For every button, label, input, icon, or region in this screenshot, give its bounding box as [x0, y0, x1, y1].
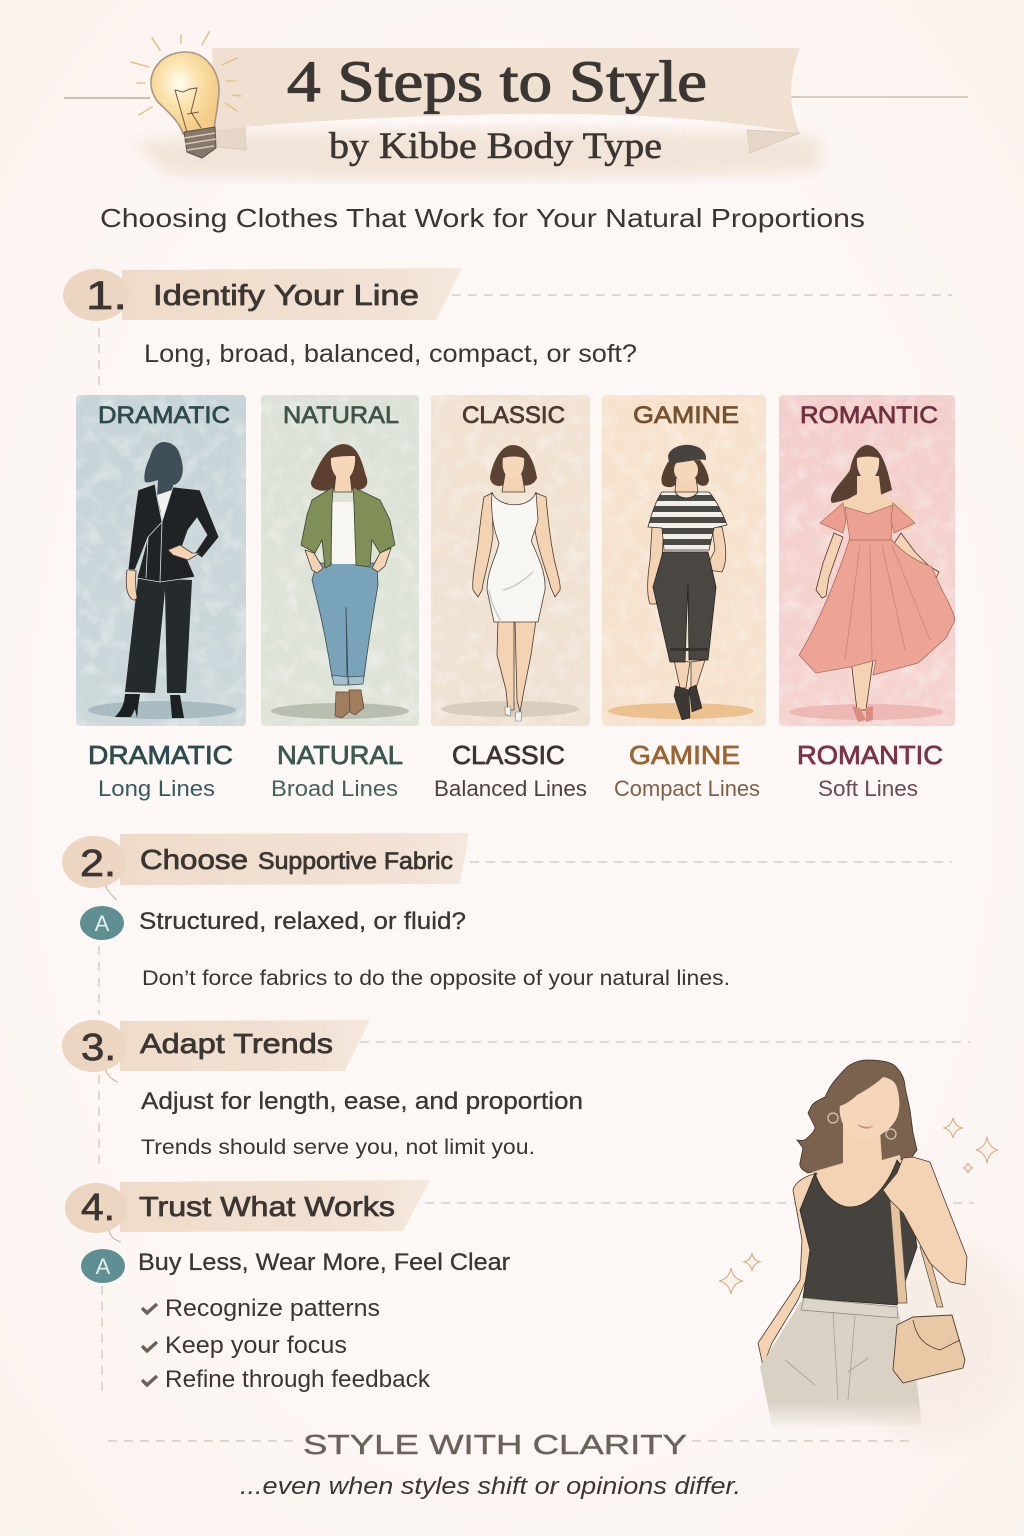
title banner [64, 48, 968, 179]
step 2 heading [62, 833, 952, 900]
checklist: Refine through feedback [165, 1366, 431, 1393]
step 3 heading: Adapt Trends [140, 1028, 333, 1059]
step 1 heading [63, 268, 952, 321]
chest and neck [812, 1120, 905, 1215]
watercolor wash behind woman [845, 1240, 1024, 1440]
step 2 heading: Supportive Fabric [258, 848, 453, 875]
panel: natural [261, 395, 419, 726]
face [840, 1077, 899, 1140]
checklist: Recognize patterns [165, 1295, 380, 1322]
step 4 heading: Trust What Works [139, 1191, 395, 1222]
panel: natural: NATURAL [283, 402, 399, 429]
type label: gamine: GAMINE [629, 740, 740, 770]
marker A: step 2 [80, 906, 124, 940]
step 4 prompt: Buy Less, Wear More, Feel Clear [138, 1249, 510, 1276]
title text: 4 Steps to Style [287, 49, 707, 114]
step 3 heading: 3. [81, 1027, 116, 1069]
marker A: step 4: A [96, 1254, 111, 1279]
trousers [760, 1298, 922, 1430]
type label: natural: Broad Lines [271, 776, 398, 801]
step 1 prompt: Long, broad, balanced, compact, or soft? [144, 340, 637, 368]
type label: romantic [797, 740, 943, 801]
hair [797, 1060, 917, 1173]
step 3 heading [62, 1020, 970, 1082]
figure: dramatic [115, 442, 219, 718]
type label: gamine [614, 740, 760, 801]
type label: natural [271, 740, 403, 801]
checklist: Keep your focus [165, 1332, 347, 1359]
panel: romantic [779, 395, 955, 726]
type label: classic [434, 740, 587, 801]
marker A: step 4 [81, 1249, 125, 1283]
type label: romantic: ROMANTIC [797, 740, 943, 770]
step 4 heading: 4. [81, 1187, 115, 1229]
checklist [142, 1295, 431, 1393]
step 2 heading: Choose [140, 844, 248, 875]
footer tagline: ...even when styles shift or opinions differ. [240, 1473, 741, 1500]
type label: dramatic [88, 740, 233, 801]
type label: dramatic: Long Lines [98, 776, 215, 801]
step 1 heading: Identify Your Line [153, 280, 419, 312]
type label: dramatic: DRAMATIC [88, 740, 233, 770]
illustration: woman with handbag [758, 1060, 967, 1430]
type label: gamine: Compact Lines [614, 776, 760, 801]
step 2 prompt: Structured, relaxed, or fluid? [139, 908, 466, 935]
panel: dramatic [76, 395, 246, 726]
intro sentence: Choosing Clothes That Work for Your Natural Proportions [100, 203, 865, 233]
panel: gamine [602, 395, 766, 726]
step 2 note: Don’t force fabrics to do the opposite of your natural lines. [142, 967, 730, 990]
step 4 heading [65, 1180, 974, 1242]
panel: classic: CLASSIC [462, 402, 565, 429]
right arm and hand [883, 1157, 967, 1285]
subtitle text: by Kibbe Body Type [329, 126, 662, 167]
panel: gamine: GAMINE [633, 402, 739, 429]
panel: dramatic: DRAMATIC [98, 402, 230, 429]
handbag [893, 1315, 965, 1383]
marker A: step 2: A [95, 911, 110, 936]
step 2 heading: 2. [80, 843, 116, 885]
tank top [800, 1160, 917, 1305]
type label: classic: CLASSIC [452, 740, 565, 770]
figure: romantic [799, 445, 955, 722]
footer tagline [108, 1429, 915, 1500]
ribbon folds [215, 123, 246, 150]
type label: natural: NATURAL [277, 740, 403, 770]
ribbon body [212, 48, 800, 133]
panel: classic [431, 395, 590, 726]
left arm [758, 1173, 817, 1366]
type label: romantic: Soft Lines [818, 776, 918, 801]
step 3 prompt: Adjust for length, ease, and proportion [141, 1088, 583, 1115]
icon: light bulb [131, 32, 241, 158]
sparkles [719, 1118, 998, 1294]
figure: gamine [648, 445, 727, 720]
figure: natural [301, 444, 395, 718]
footer tagline: STYLE WITH CLARITY [303, 1429, 687, 1460]
type label: classic: Balanced Lines [434, 776, 587, 801]
bag straps [920, 1247, 943, 1307]
step 3 note: Trends should serve you, not limit you. [141, 1136, 535, 1159]
step 1 heading: 1. [86, 274, 127, 318]
panel: romantic: ROMANTIC [800, 402, 938, 429]
figure: classic [473, 445, 560, 721]
